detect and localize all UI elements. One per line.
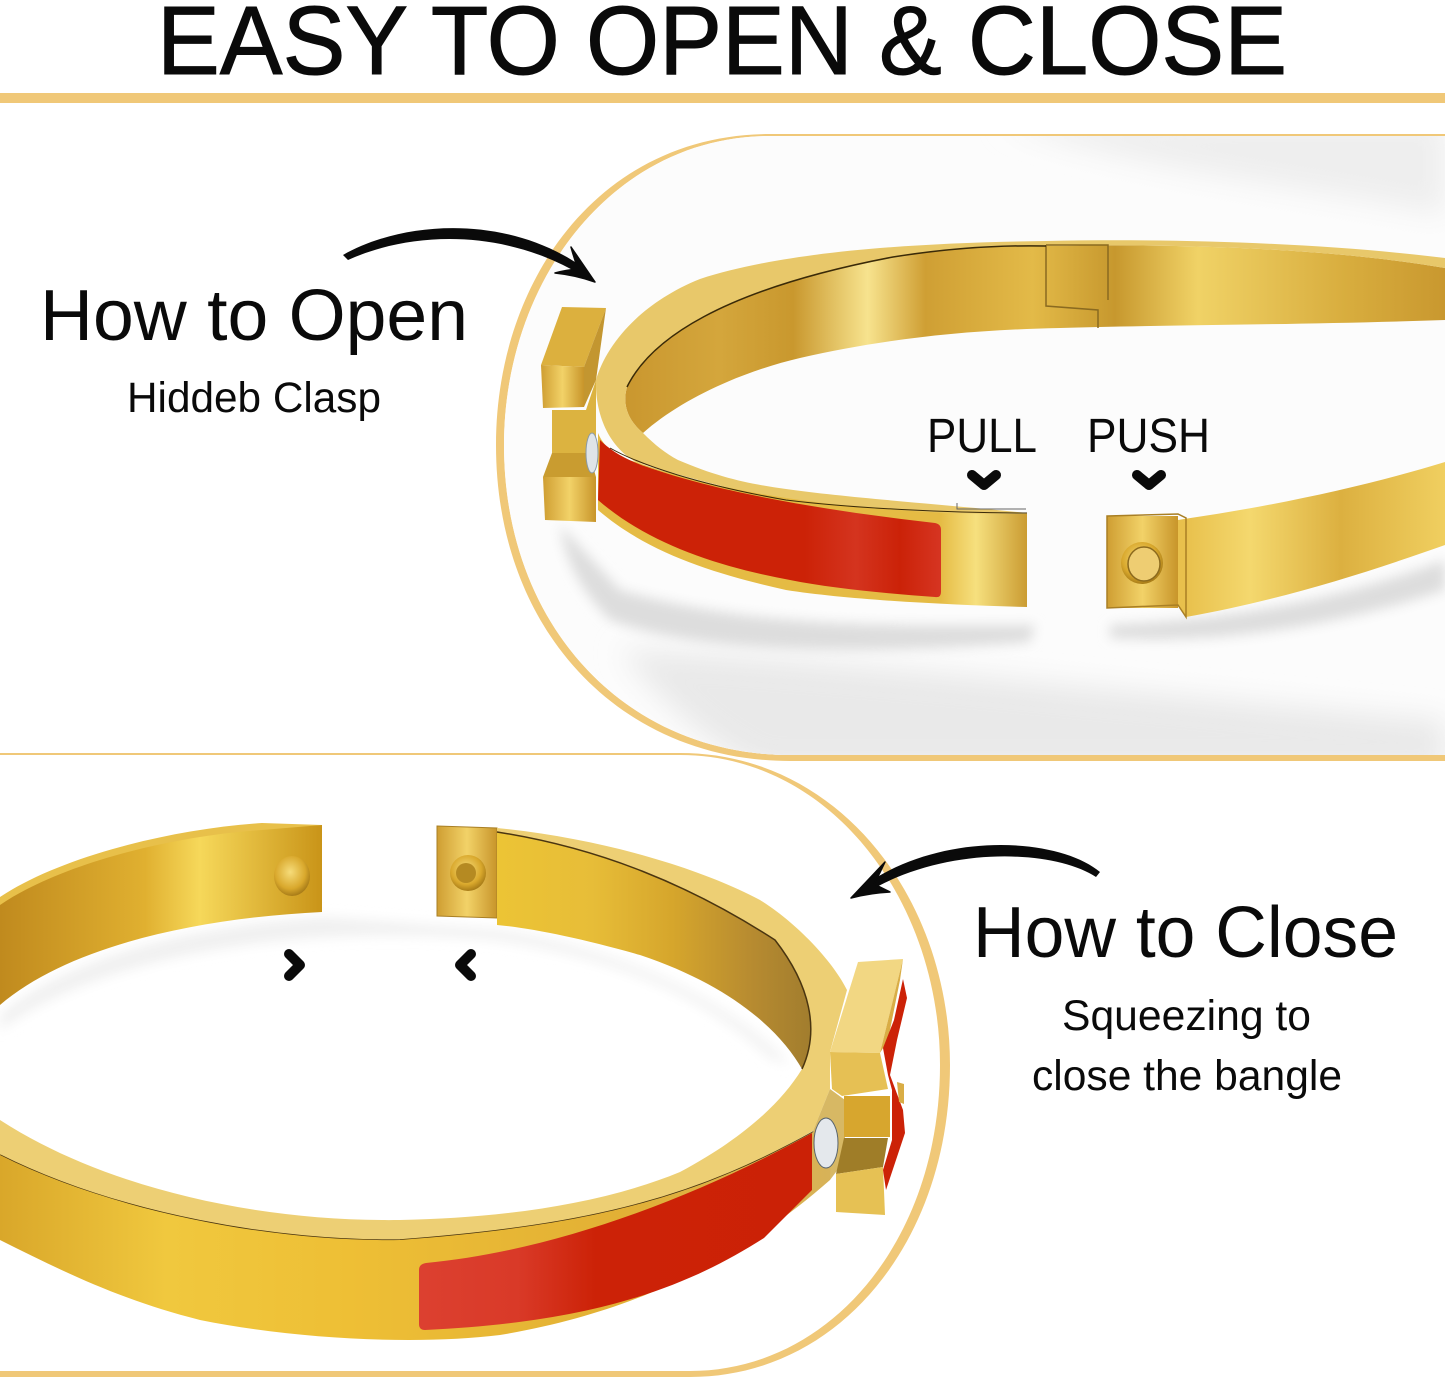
panel: how to open photo (496, 120, 1445, 770)
pin (1121, 542, 1163, 584)
icon: push chevron (1137, 475, 1161, 485)
red enamel left arm (598, 440, 941, 597)
edge cut (957, 503, 1026, 509)
rim line (627, 246, 1046, 387)
inner wall (625, 245, 1445, 433)
panel background (504, 136, 1445, 755)
red enamel (419, 1133, 812, 1330)
label: pull: PULL (927, 410, 1037, 463)
right rim (0, 828, 847, 1240)
arrow: to open clasp (343, 228, 595, 282)
icon: right chevron (460, 954, 471, 976)
front band (598, 433, 1027, 607)
right rim line (497, 832, 811, 1069)
closing bangle (0, 823, 847, 1340)
text: squeezing instruction (1032, 992, 1342, 1100)
heading: how to open: How to Open (40, 276, 468, 356)
panel: how to close photo (0, 753, 950, 1377)
arrow: to close clasp (851, 845, 1100, 898)
right pin (450, 855, 486, 891)
front band (0, 1120, 832, 1340)
title underline bar (0, 93, 1445, 103)
right arm wall (497, 832, 811, 1069)
left arm wall (0, 825, 322, 1005)
clasp tab (1107, 516, 1178, 608)
front rim line (610, 448, 1027, 513)
clasp seat (813, 1089, 845, 1180)
label: push: PUSH (1087, 410, 1210, 463)
icon: pull chevron (972, 475, 996, 485)
text: squeezing instruction: close the bangle (1032, 1052, 1342, 1100)
ornament close (830, 959, 907, 1215)
soft shading (560, 120, 1445, 770)
text: squeezing instruction: Squeezing to (1062, 992, 1311, 1040)
top rim (596, 240, 1445, 520)
rim line (0, 1131, 815, 1240)
icon: left chevron (289, 954, 300, 976)
text: hidden clasp: Hiddeb Clasp (127, 374, 381, 422)
ornament open (541, 307, 606, 522)
soft shadow inside ring (0, 917, 790, 1065)
left arm top edge (0, 823, 322, 905)
left pin (274, 856, 310, 896)
crystal (586, 433, 598, 473)
hinge (1046, 245, 1108, 328)
heading: how to close: How to Close (973, 893, 1398, 973)
right arm (1178, 462, 1445, 617)
crystal (814, 1118, 838, 1168)
panel outline (0, 753, 950, 1377)
panel outline (496, 134, 1445, 761)
open bangle (596, 240, 1445, 617)
right tab (437, 826, 497, 918)
